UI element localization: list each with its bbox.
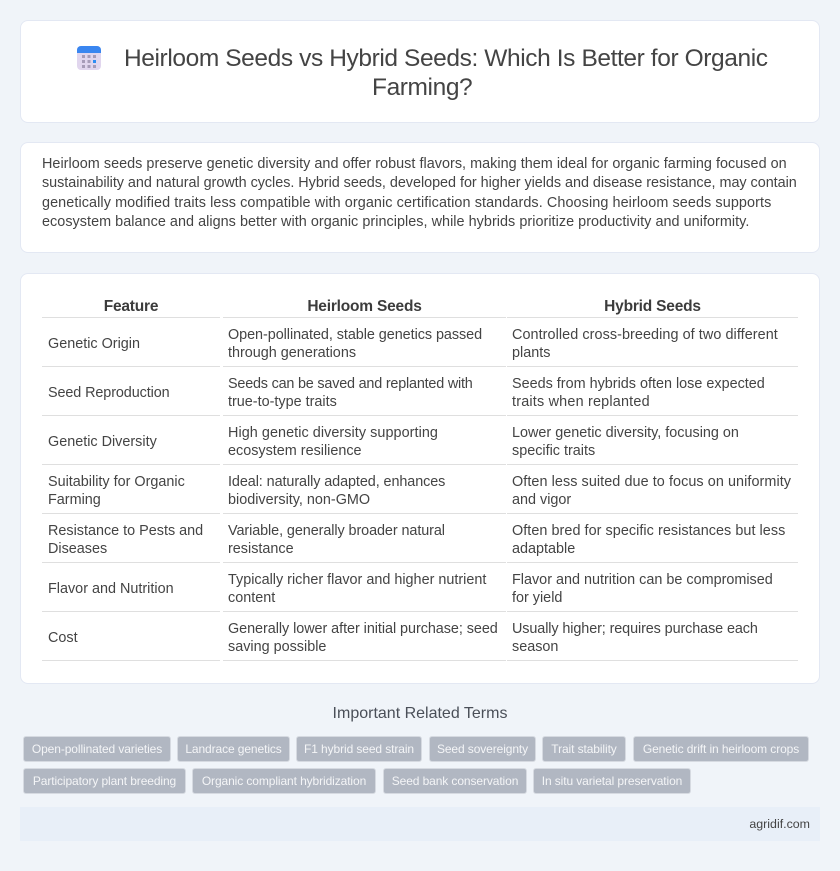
tag — [23, 768, 186, 794]
cell: heirloom genetic origin: Open-pollinated, stable genetics passed — [228, 327, 482, 343]
cell: heirloom flavor: Typically richer flavor and higher nutrient — [228, 572, 486, 588]
title: Farming? — [372, 74, 472, 101]
cell: hybrid suitability: Often less suited due to focus on uniformity — [512, 474, 791, 490]
row: Cost: Cost — [48, 630, 78, 646]
cell: hybrid flavor: for yield — [512, 590, 562, 606]
cell: hybrid resistance: Often bred for specific resistances but less — [512, 523, 785, 539]
column header: Hybrid Seeds: Hybrid Seeds — [604, 298, 701, 315]
cell: heirloom genetic diversity — [228, 425, 438, 459]
column header: Heirloom Seeds: Heirloom Seeds — [307, 298, 422, 315]
row: Resistance to Pests and Diseases: Diseases — [48, 541, 107, 557]
tag: Trait stability — [551, 742, 617, 756]
cell: heirloom genetic diversity: High genetic diversity supporting — [228, 425, 438, 441]
tag — [542, 736, 626, 762]
tag — [23, 736, 171, 762]
text block: introduction: ecosystem balance and aligns better with organic principles, while hybrids prioritize productivity and uniformity. — [42, 214, 749, 230]
comparison table — [42, 298, 798, 661]
text block: introduction: sustainability and natural growth cycles. Hybrid seeds, developed for higher yields and disease resistance, may contain — [42, 175, 797, 191]
tag — [383, 768, 527, 794]
tag: Participatory plant breeding — [33, 774, 176, 788]
cell: heirloom suitability: biodiversity, non-GMO — [228, 492, 370, 508]
cell: hybrid flavor — [512, 572, 773, 606]
cell: heirloom seed reproduction — [228, 376, 473, 410]
text block: introduction: genetically modified traits less compatible with organic certification standards. Choosing heirloom seeds supports — [42, 195, 771, 211]
cell: heirloom cost: Generally lower after initial purchase; seed — [228, 621, 498, 637]
row: Genetic Diversity: Genetic Diversity — [48, 434, 157, 450]
text block: introduction — [42, 156, 797, 230]
cell: heirloom genetic origin: through generations — [228, 345, 356, 361]
cell: heirloom resistance: resistance — [228, 541, 294, 557]
tag — [633, 736, 809, 762]
cell: heirloom cost: saving possible — [228, 639, 326, 655]
cell: heirloom genetic origin — [228, 327, 482, 361]
cell: heirloom suitability: Ideal: naturally adapted, enhances — [228, 474, 445, 490]
cell: hybrid genetic origin — [512, 327, 778, 361]
cell: hybrid suitability — [512, 474, 791, 508]
tag: Organic compliant hybridization — [202, 774, 366, 788]
tag: F1 hybrid seed strain — [304, 742, 414, 756]
tag: In situ varietal preservation — [542, 774, 682, 788]
icon: calendar — [77, 46, 101, 70]
cell: heirloom resistance: Variable, generally broader natural — [228, 523, 445, 539]
row: Resistance to Pests and Diseases — [48, 523, 203, 557]
cell: hybrid seed reproduction: Seeds from hybrids often lose expected — [512, 376, 765, 392]
column header: Feature: Feature — [104, 298, 158, 315]
tag — [177, 736, 290, 762]
cell: heirloom suitability — [228, 474, 445, 508]
cell: hybrid genetic diversity: Lower genetic diversity, focusing on — [512, 425, 739, 441]
cell: heirloom flavor — [228, 572, 486, 606]
cell: hybrid resistance: adaptable — [512, 541, 575, 557]
cell: hybrid genetic diversity: specific traits — [512, 443, 595, 459]
row: Suitability for Organic Farming: Farming — [48, 492, 101, 508]
cell: hybrid cost — [512, 621, 758, 655]
row: Flavor and Nutrition: Flavor and Nutrition — [48, 581, 174, 597]
cell: hybrid seed reproduction — [512, 376, 765, 410]
cell: hybrid flavor: Flavor and nutrition can be compromised — [512, 572, 773, 588]
tag — [192, 768, 376, 794]
cell: hybrid seed reproduction: traits when replanted — [512, 394, 650, 410]
panel: title card — [20, 20, 820, 123]
cell: hybrid cost: Usually higher; requires purchase each — [512, 621, 758, 637]
tag: Seed sovereignty — [437, 742, 528, 756]
row: Suitability for Organic Farming: Suitability for Organic — [48, 474, 185, 490]
text block: introduction: Heirloom seeds preserve genetic diversity and offer robust flavors, making them ideal for organic farming focused on — [42, 156, 787, 172]
cell: hybrid genetic origin: Controlled cross-breeding of two different — [512, 327, 778, 343]
title — [124, 45, 768, 101]
tag — [296, 736, 422, 762]
cell: heirloom flavor: content — [228, 590, 275, 606]
row: Genetic Origin: Genetic Origin — [48, 336, 140, 352]
heading: Important Related Terms: Important Related Terms — [333, 705, 507, 722]
tag — [533, 768, 691, 794]
cell: hybrid suitability: and vigor — [512, 492, 571, 508]
cell: hybrid resistance — [512, 523, 785, 557]
tag: Landrace genetics — [185, 742, 282, 756]
tag: Seed bank conservation — [392, 774, 518, 788]
cell: heirloom resistance — [228, 523, 445, 557]
panel: comparison table — [20, 273, 820, 684]
cell: hybrid genetic origin: plants — [512, 345, 550, 361]
row: Resistance to Pests and Diseases: Resistance to Pests and — [48, 523, 203, 539]
cell: hybrid cost: season — [512, 639, 558, 655]
cell: heirloom seed reproduction: true-to-type traits — [228, 394, 337, 410]
related term tags — [23, 736, 809, 794]
row: Seed Reproduction: Seed Reproduction — [48, 385, 170, 401]
panel: introduction — [20, 142, 820, 253]
row: Suitability for Organic Farming — [48, 474, 185, 508]
footer text: agridif.com: agridif.com — [749, 817, 810, 831]
tag — [429, 736, 536, 762]
footer bar — [20, 807, 820, 841]
tag: Open-pollinated varieties — [32, 742, 162, 756]
cell: hybrid genetic diversity — [512, 425, 739, 459]
title: Heirloom Seeds vs Hybrid Seeds: Which Is Better for Organic — [124, 45, 768, 72]
tag: Genetic drift in heirloom crops — [643, 742, 799, 756]
cell: heirloom seed reproduction: Seeds can be saved and replanted with — [228, 376, 473, 392]
cell: heirloom cost — [228, 621, 498, 655]
cell: heirloom genetic diversity: ecosystem resilience — [228, 443, 362, 459]
